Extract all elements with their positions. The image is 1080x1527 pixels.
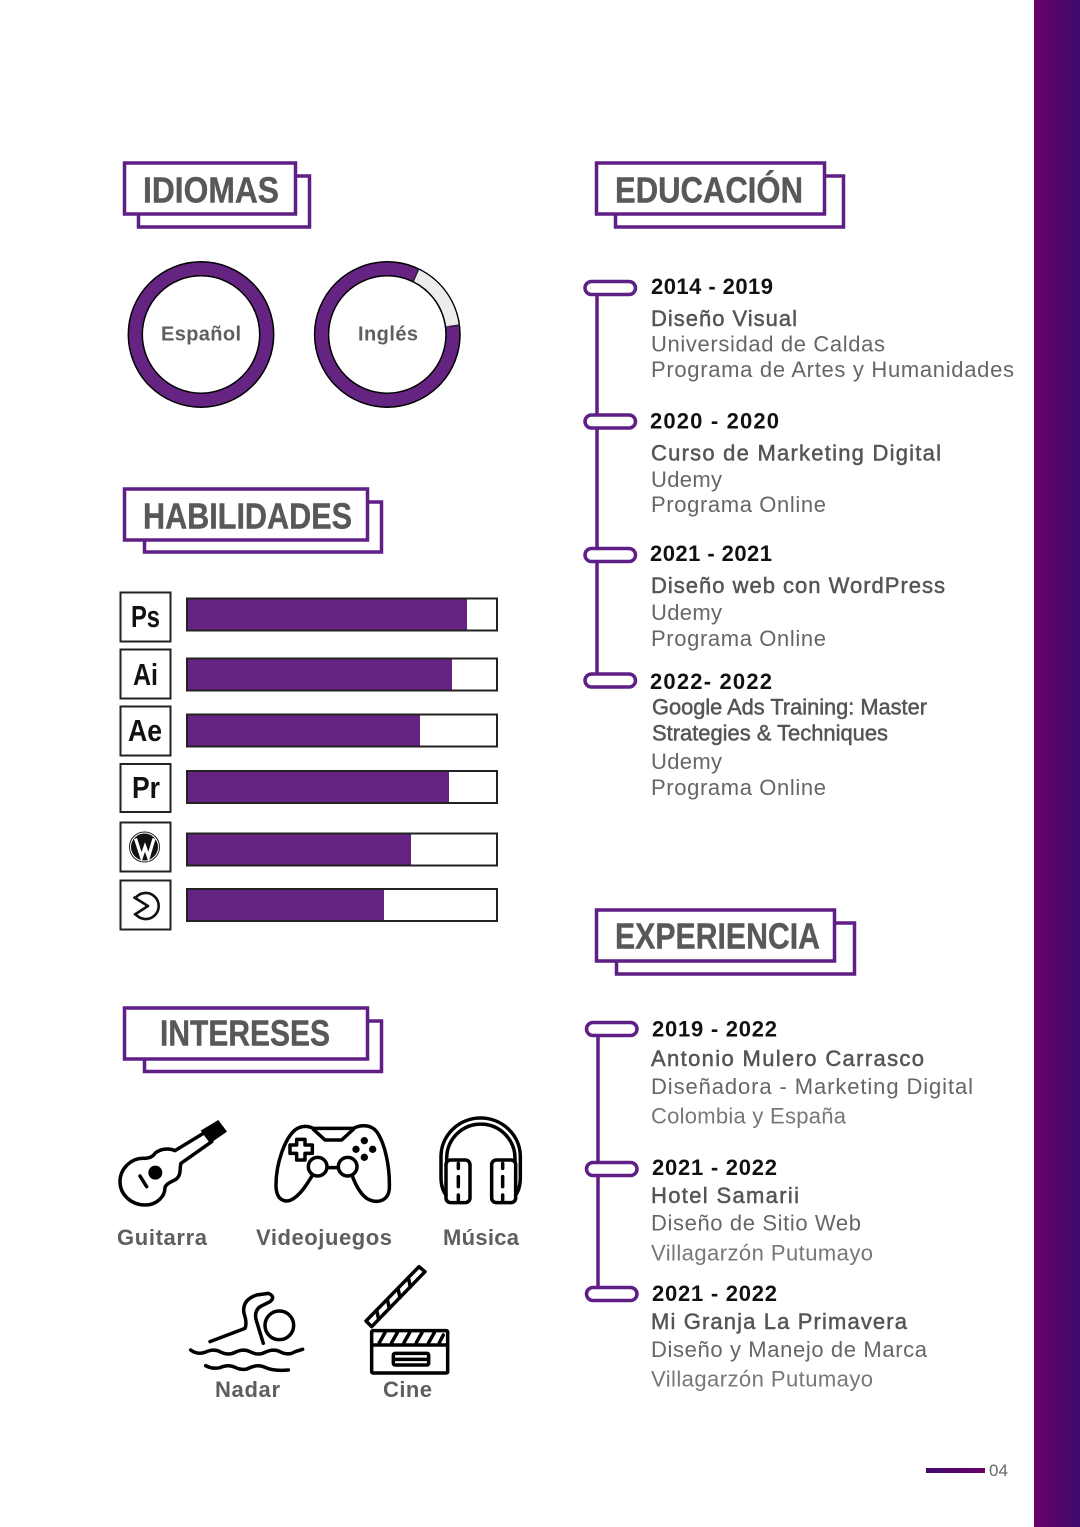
entry: Diseño web con WordPress: [650, 541, 945, 651]
icon: guitar: [120, 1120, 227, 1205]
skill: Premiere: Pr: [132, 770, 160, 805]
entry: Curso de Marketing Digital: Udemy: [651, 467, 722, 492]
entry: Curso de Marketing Digital: 2020 - 2020: [650, 408, 779, 434]
heading: Idiomas: [124, 163, 310, 227]
entry: Hotel Samarii: 2021 - 2022: [652, 1155, 777, 1180]
entry: Hotel Samarii: [651, 1155, 873, 1266]
label: Música: Música: [443, 1225, 520, 1250]
icon: game controller: [276, 1126, 389, 1201]
heading: Educación: [596, 163, 844, 227]
label: Videojuegos: Videojuegos: [256, 1225, 392, 1250]
skill: After Effects: [120, 706, 497, 756]
entry: Google Ads Training: Strategies & Techniques: [652, 720, 888, 746]
label: Nadar: Nadar: [215, 1377, 280, 1402]
heading: Experiencia: EXPERIENCIA: [615, 916, 820, 956]
timeline: education: [585, 274, 1014, 800]
label: Cine: Cine: [383, 1377, 432, 1402]
entry: Antonio Mulero Carrasco: 2019 - 2022: [652, 1016, 777, 1042]
icon: headphones: [441, 1118, 520, 1203]
entry: Diseño Visual: Universidad de Caldas: [651, 332, 885, 356]
donut: Inglés: Inglés: [358, 324, 418, 346]
skill: Illustrator: [120, 650, 497, 698]
heading: Intereses: INTERESES: [160, 1012, 330, 1054]
entry: Curso de Marketing Digital: Curso de Marketing Digital: [651, 440, 941, 466]
entry: Diseño web con WordPress: 2021 - 2021: [650, 541, 772, 566]
icon: swimmer: [191, 1293, 303, 1370]
entry: Antonio Mulero Carrasco: Diseñadora - Marketing Digital: [651, 1074, 973, 1099]
skill: WordPress: [120, 822, 170, 872]
heading: Experiencia: [596, 910, 854, 974]
entry: Diseño web con WordPress: Programa Online: [651, 626, 826, 651]
entry: Google Ads Training: [650, 669, 927, 800]
entry: Hotel Samarii: Villagarzón Putumayo: [651, 1240, 873, 1266]
icon: clapperboard: [366, 1267, 448, 1373]
donut: Español: Español: [161, 324, 241, 346]
skill: Illustrator: Ai: [133, 657, 158, 692]
donut: Español: [135, 269, 267, 400]
entry: Google Ads Training: Google Ads Training: Master: [652, 694, 927, 720]
panel: skills bars: [120, 592, 497, 930]
heading: Habilidades: HABILIDADES: [143, 496, 352, 536]
entry: Mi Granja La Primavera: Diseño y Manejo de Marca: [651, 1337, 928, 1362]
entry: Mi Granja La Primavera: Mi Granja La Primavera: [651, 1309, 908, 1334]
entry: Mi Granja La Primavera: Villagarzón Putumayo: [651, 1366, 873, 1392]
timeline: experience: [586, 1016, 973, 1392]
panel: language donut charts: [135, 268, 460, 400]
heading: Idiomas: IDIOMAS: [143, 170, 279, 210]
page number: 04: [989, 1461, 1008, 1480]
entry: Hotel Samarii: Diseño de Sitio Web: [651, 1210, 861, 1236]
donut: Inglés: [322, 268, 460, 400]
decorative side band: [1034, 0, 1080, 1527]
entry: Mi Granja La Primavera: [651, 1281, 928, 1392]
entry: Diseño web con WordPress: Diseño web con WordPress: [651, 573, 945, 598]
entry: Hotel Samarii: Hotel Samarii: [651, 1183, 799, 1208]
skill: Google Analytics / Ads: [120, 880, 497, 930]
heading: Habilidades: [124, 489, 382, 552]
entry: Curso de Marketing Digital: Programa Online: [651, 492, 826, 517]
entry: Diseño Visual: Diseño Visual: [651, 306, 797, 331]
label: Guitarra: Guitarra: [117, 1225, 208, 1250]
entry: Google Ads Training: 2022- 2022: [650, 669, 772, 694]
bar: WordPress: [187, 834, 497, 866]
page number: [926, 1461, 1008, 1480]
entry: Mi Granja La Primavera: 2021 - 2022: [652, 1281, 777, 1306]
entry: Antonio Mulero Carrasco: Colombia y España: [651, 1104, 847, 1128]
skill: Photoshop: [120, 592, 497, 642]
skill: Photoshop: Ps: [131, 599, 160, 634]
heading: Educación: EDUCACIÓN: [615, 168, 803, 210]
panel: interests: [117, 1118, 520, 1402]
entry: Diseño Visual: [651, 274, 1014, 382]
entry: Antonio Mulero Carrasco: [651, 1016, 973, 1128]
skill: Premiere: [120, 764, 497, 812]
heading: Intereses: [124, 1008, 382, 1072]
skill: After Effects: Ae: [128, 713, 162, 748]
entry: Diseño web con WordPress: Udemy: [651, 600, 722, 625]
entry: Google Ads Training: Udemy: [651, 749, 722, 774]
entry: Curso de Marketing Digital: [650, 408, 941, 517]
entry: Diseño Visual: Programa de Artes y Humanidades: [651, 357, 1014, 382]
entry: Google Ads Training: Programa Online: [651, 775, 826, 800]
entry: Diseño Visual: 2014 - 2019: [651, 274, 773, 299]
entry: Antonio Mulero Carrasco: Antonio Mulero Carrasco: [651, 1046, 924, 1071]
